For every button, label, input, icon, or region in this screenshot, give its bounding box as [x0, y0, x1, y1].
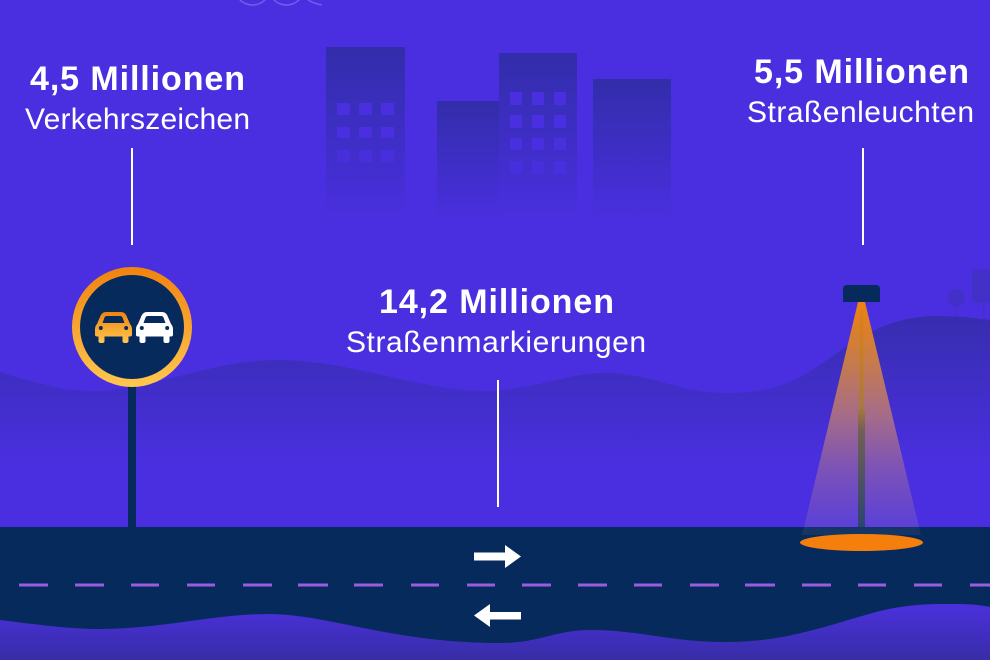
arrow left — [474, 604, 521, 627]
stat: road markings — [346, 283, 646, 359]
lamp pole — [858, 310, 865, 527]
sign post — [128, 385, 136, 527]
background hills — [0, 316, 990, 527]
city skyline — [326, 47, 671, 222]
decorative circles at top edge — [234, 0, 322, 5]
sign: no overtaking — [72, 267, 192, 527]
connector: traffic signs — [131, 148, 133, 245]
light pool — [800, 534, 923, 551]
foreground wave — [0, 604, 990, 660]
arrow right — [474, 545, 521, 568]
icon: white car — [136, 312, 173, 343]
lane centre dashes — [19, 584, 990, 586]
connector: road markings — [497, 380, 499, 507]
road — [0, 527, 990, 660]
stat: road markings: 14,2 Millionen — [379, 283, 614, 321]
stat: street lights: 5,5 Millionen — [754, 53, 969, 91]
sign face — [80, 275, 184, 379]
light spill on road — [802, 527, 921, 535]
distant trees — [947, 269, 990, 320]
sign ring — [72, 267, 192, 387]
stat: traffic signs — [25, 60, 250, 136]
stat: street lights: Straßenleuchten — [747, 96, 974, 129]
connector: street lights — [862, 148, 864, 245]
stat: road markings: Straßenmarkierungen — [346, 326, 646, 359]
street lamp — [800, 285, 923, 551]
stat: traffic signs: 4,5 Millionen — [30, 60, 245, 98]
light cone — [804, 302, 919, 527]
stat: traffic signs: Verkehrszeichen — [25, 103, 250, 136]
stat: street lights — [747, 53, 974, 129]
icon: orange car — [95, 312, 132, 343]
lamp head — [843, 285, 880, 302]
